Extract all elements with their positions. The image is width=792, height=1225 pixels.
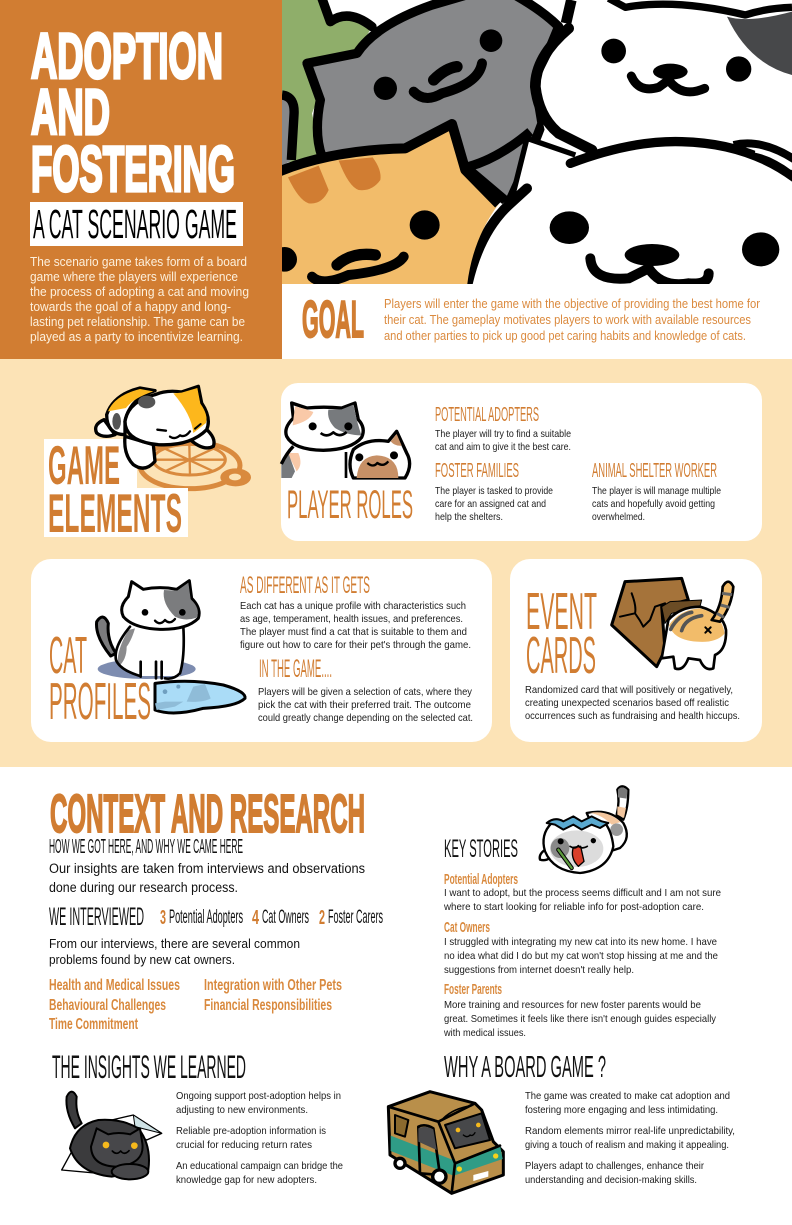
role: potential adopters <box>435 404 571 453</box>
intro text: played as a party to incentivize learning. <box>30 329 243 344</box>
insights text: Ongoing support post-adoption helps in <box>176 1090 341 1102</box>
icon: calico cat <box>96 386 214 468</box>
problems text: From our interviews, there are several common <box>49 936 300 951</box>
text: in the game: could greatly change depending on the selected cat. <box>258 712 473 724</box>
panel: event cards: CARDS <box>526 627 596 685</box>
title: FOSTERING <box>31 133 235 205</box>
board game text <box>525 1090 735 1186</box>
panel: goal <box>282 284 792 359</box>
role: foster families: The player is tasked to provide <box>435 485 553 497</box>
section: key stories <box>443 786 721 1039</box>
story: potential adopters <box>443 871 721 913</box>
problems text <box>49 936 300 967</box>
insights text <box>176 1090 343 1186</box>
board game text: understanding and decision-making skills. <box>525 1174 697 1186</box>
board game text: Random elements mirror real-life unpredictability, <box>525 1125 735 1137</box>
icon: black cat with paper plane <box>62 1092 162 1179</box>
intro text: done during our research process. <box>49 880 238 895</box>
intro text: the process of adopting a cat and moving <box>30 284 249 299</box>
event card text: creating unexpected scenarios based off realistic <box>525 697 729 709</box>
text: in the game: IN THE GAME.... <box>259 655 332 683</box>
panel: goal: GOAL <box>302 291 364 349</box>
panel: event cards: EVENT <box>526 583 597 641</box>
event card text: occurrences such as fundraising and health hiccups. <box>525 710 740 722</box>
panel: player roles <box>281 383 762 541</box>
story: cat owners: no idea what did I do but my cat won't stop hissing at me and the <box>444 950 718 962</box>
panel: title block: A CAT SCENARIO GAME <box>33 201 237 247</box>
interview counts: 4 <box>252 907 260 929</box>
text: as different as it gets <box>240 572 471 651</box>
story: foster parents <box>443 981 717 1039</box>
section: the insights we learned: THE INSIGHTS WE LEARNED <box>52 1049 246 1085</box>
panel: title block <box>0 0 282 359</box>
event card text: Randomized card that will positively or negatively, <box>525 684 733 696</box>
interview counts: 3 <box>160 907 166 929</box>
problem list <box>49 977 342 1033</box>
section: key stories: KEY STORIES <box>444 835 518 863</box>
problem list: Behavioural Challenges <box>49 997 166 1014</box>
insights text: An educational campaign can bridge the <box>176 1160 343 1172</box>
insights text: adjusting to new environments. <box>176 1104 308 1116</box>
text: in the game: Players will be given a selection of cats, where they <box>258 686 473 698</box>
insights text: crucial for reducing return rates <box>176 1139 312 1151</box>
text: in the game <box>258 655 473 724</box>
intro text: towards the goal of a happy and long- <box>30 299 231 314</box>
text: ELEMENTS <box>48 482 182 544</box>
heading: game elements: GAME <box>48 434 120 496</box>
intro text: The scenario game takes form of a board <box>30 254 247 269</box>
role: animal shelter worker: overwhelmed. <box>592 511 645 523</box>
text: CONTEXT AND RESEARCH <box>50 784 365 844</box>
story: potential adopters: I want to adopt, but the process seems difficult and I am not sure <box>444 887 721 899</box>
interview counts: 2 <box>319 907 325 929</box>
text: in the game: pick the cat with their preferred trait. The outcome <box>258 699 471 711</box>
icon: cat in box <box>612 578 733 669</box>
story: foster parents: Foster Parents <box>444 981 502 998</box>
story: cat owners: Cat Owners <box>444 919 490 936</box>
insights text: knowledge gap for new adopters. <box>176 1174 317 1186</box>
text: as different as it gets: The player must find a cat that is suitable to them and <box>240 626 467 638</box>
intro text: Our insights are taken from interviews and observations <box>49 861 365 876</box>
board game text: fostering more engaging and less intimidating. <box>525 1104 718 1116</box>
heading: game elements <box>44 434 188 544</box>
role: foster families: care for an assigned cat and <box>435 498 546 510</box>
interview counts: Cat Owners <box>262 907 309 928</box>
story: cat owners: suggestions from internet doesn't really help. <box>444 964 634 976</box>
problems text: problems found by new cat owners. <box>49 952 235 967</box>
story: cat owners <box>444 919 718 976</box>
story: potential adopters: where to start looking for reliable info for post-adoption care. <box>443 901 704 913</box>
icon: two cats <box>281 403 410 478</box>
story: potential adopters: Potential Adopters <box>444 871 518 888</box>
role: foster families <box>435 460 553 523</box>
event card text <box>525 684 740 722</box>
heading: cat profiles: CAT <box>49 627 87 685</box>
goal text <box>384 296 761 343</box>
board game text: giving a touch of realism and making it appealing. <box>525 1139 729 1151</box>
icon: cat with puddle <box>97 581 245 713</box>
text: as different as it gets: as age, temperament, health issues, and preferences. <box>240 613 463 625</box>
role: animal shelter worker: cats and hopefully avoid getting <box>592 498 715 510</box>
icon: cardboard van <box>388 1092 503 1193</box>
role: foster families: help the shelters. <box>435 511 503 523</box>
interview counts: WE INTERVIEWED <box>49 903 144 931</box>
panel: cat profiles <box>31 559 492 742</box>
icon: cat eating <box>540 786 628 873</box>
title <box>31 20 235 205</box>
story: foster parents: More training and resources for new foster parents would be <box>444 999 701 1011</box>
insights text: Reliable pre-adoption information is <box>176 1125 326 1137</box>
intro text: lasting pet relationship. The game can be <box>30 314 245 329</box>
story: foster parents: great. Sometimes it feels like there isn't enough guides especially <box>444 1013 717 1025</box>
role: animal shelter worker <box>592 460 721 523</box>
hero illustration: four cats <box>272 0 792 287</box>
intro text <box>49 861 365 895</box>
subtitle box <box>30 201 243 247</box>
section: why a board game <box>388 1049 735 1193</box>
role: foster families: FOSTER FAMILIES <box>435 460 519 482</box>
title: ADOPTION <box>31 20 223 92</box>
problem list: Financial Responsibilities <box>204 997 332 1014</box>
interview counts: Potential Adopters <box>169 907 243 928</box>
role: potential adopters: cat and aim to give it the best care. <box>435 441 571 453</box>
problem list: Time Commitment <box>49 1016 138 1033</box>
problem list: Integration with Other Pets <box>204 977 342 994</box>
role: potential adopters: The player will try to find a suitable <box>435 428 571 440</box>
heading: cat profiles <box>49 627 151 731</box>
text: as different as it gets: AS DIFFERENT AS IT GETS <box>240 572 370 599</box>
story: foster parents: with medical issues. <box>443 1027 526 1039</box>
section: context and research <box>49 784 383 1033</box>
cream section background <box>0 359 792 767</box>
text: as different as it gets: Each cat has a unique profile with characteristics such <box>240 600 466 612</box>
intro text <box>30 254 249 344</box>
problem list: Health and Medical Issues <box>49 977 180 994</box>
story: cat owners: I struggled with integrating my new cat into its new home. I have <box>444 936 717 948</box>
role: animal shelter worker: The player is will manage multiple <box>592 485 721 497</box>
section: the insights we learned <box>52 1049 343 1186</box>
section: why a board game: WHY A BOARD GAME ? <box>444 1049 606 1084</box>
panel: player roles: PLAYER ROLES <box>287 483 413 527</box>
board game text: The game was created to make cat adoption and <box>525 1090 730 1102</box>
panel: event cards <box>510 559 762 742</box>
text: as different as it gets: figure out how to care for their pet's through the game. <box>240 639 471 651</box>
board game text: Players adapt to challenges, enhance their <box>525 1160 704 1172</box>
section: context and research: HOW WE GOT HERE, AND WHY WE CAME HERE <box>49 836 243 858</box>
interview counts <box>49 903 383 931</box>
icon: orange slice <box>140 442 251 489</box>
panel: cat profiles: PROFILES <box>49 673 151 731</box>
text: Foster Carers <box>328 907 383 928</box>
title: AND <box>31 76 110 148</box>
intro text: game where the players will experience <box>30 269 238 284</box>
heading: event cards <box>526 583 597 685</box>
role: potential adopters: POTENTIAL ADOPTERS <box>435 404 539 426</box>
